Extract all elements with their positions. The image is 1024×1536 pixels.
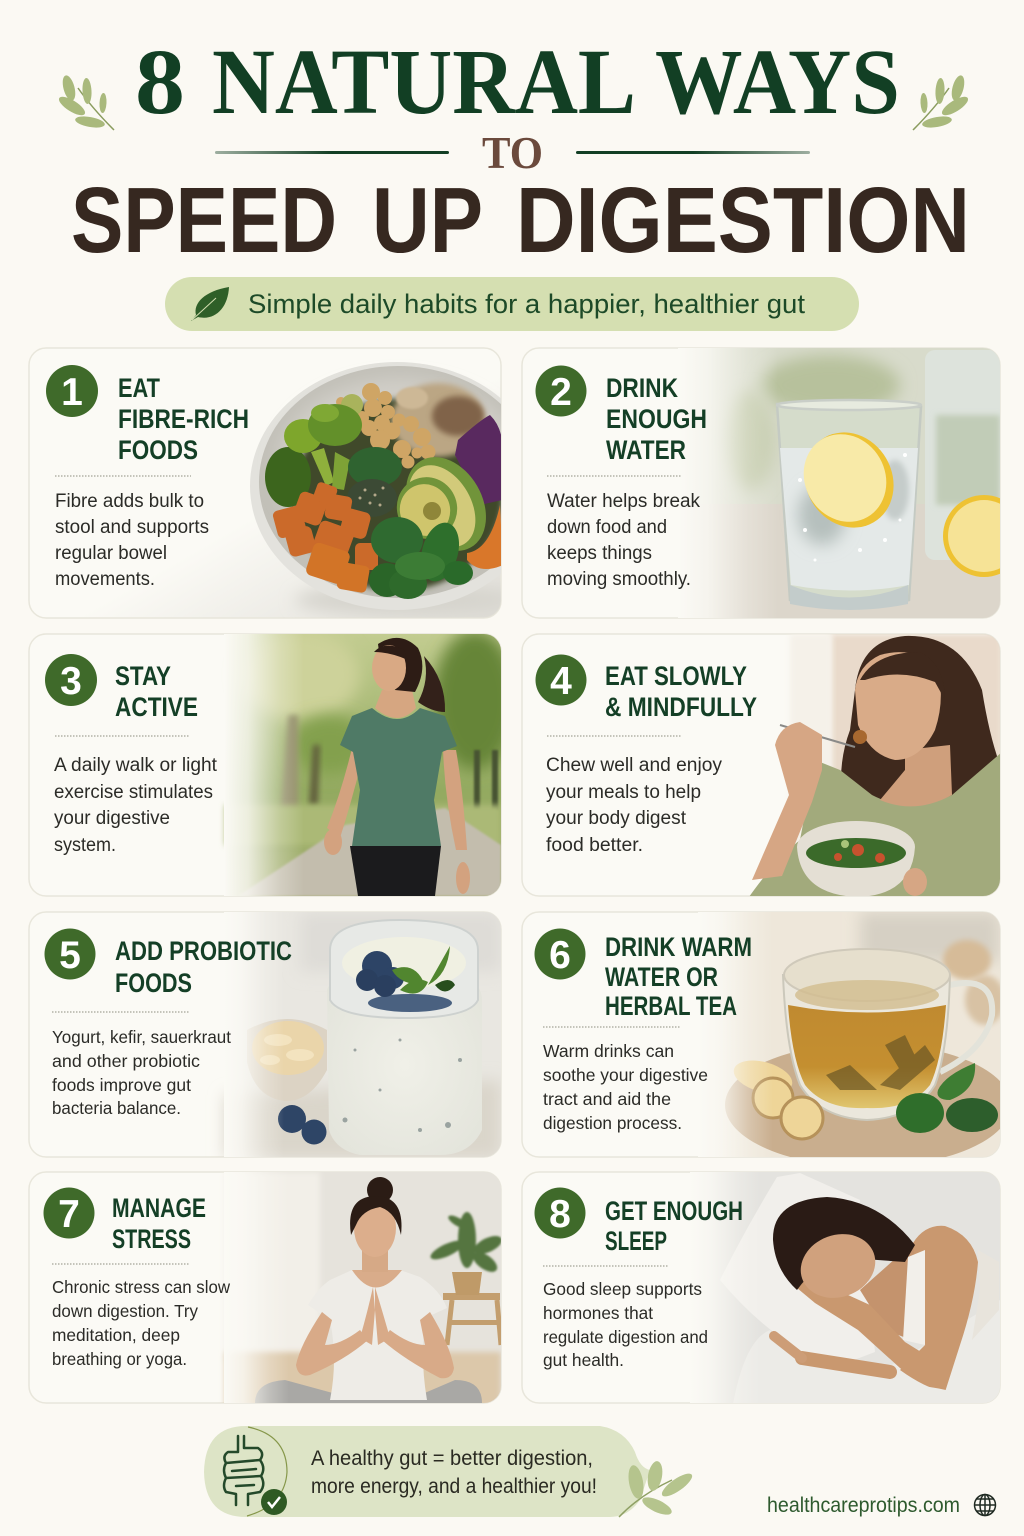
carrot	[467, 505, 503, 569]
number badge	[536, 366, 586, 416]
panel: 8 get enough sleep	[522, 1172, 1002, 1404]
heading	[115, 661, 198, 722]
header	[56, 31, 971, 331]
body text: your digestive	[54, 808, 170, 829]
heading: & MINDFULLY	[605, 692, 757, 722]
heading: FIBRE-RICH	[118, 404, 249, 434]
number badge: 1	[61, 371, 83, 414]
number badge: 3	[60, 660, 82, 703]
heading: SLEEP	[605, 1226, 667, 1256]
body text: soothe your digestive	[543, 1065, 708, 1085]
body text: meditation, deep	[52, 1325, 180, 1345]
body text	[52, 1277, 230, 1369]
panel: 1 eat fibre-rich foods	[29, 348, 544, 618]
heading	[605, 661, 757, 722]
number badge: 2	[550, 371, 572, 414]
photo: herbal tea	[698, 912, 1011, 1167]
heading: ACTIVE	[115, 692, 198, 722]
heading: EAT SLOWLY	[605, 661, 747, 691]
heading: DRINK	[606, 373, 678, 403]
title line 1: 8	[135, 31, 185, 134]
number badge: 5	[59, 934, 81, 977]
body text	[547, 491, 700, 590]
avocado	[406, 457, 486, 551]
heading: GET ENOUGH	[605, 1196, 743, 1226]
panel: 7 manage stress	[29, 1172, 505, 1407]
number badge	[45, 654, 97, 706]
heading	[118, 373, 249, 465]
website: healthcareprotips.com	[767, 1494, 960, 1517]
heading: ENOUGH	[606, 404, 707, 434]
cabbage	[455, 415, 502, 505]
title line 1	[135, 31, 900, 134]
title connector	[215, 127, 810, 178]
body text	[546, 755, 723, 856]
heading: STAY	[115, 661, 171, 691]
icon: check badge	[261, 1489, 287, 1515]
heading: ADD PROBIOTIC	[115, 936, 292, 966]
body text: hormones that	[543, 1303, 653, 1323]
body text: movements.	[55, 569, 155, 590]
heading: DRINK WARM	[605, 932, 752, 962]
body text	[54, 755, 218, 856]
body text: food better.	[546, 835, 643, 856]
body text: bacteria balance.	[52, 1098, 181, 1118]
panel: 2 drink enough water	[522, 348, 1024, 618]
heading	[605, 932, 752, 1021]
panel: 4 eat slowly	[522, 634, 1002, 897]
title line 2: DIGESTION	[516, 168, 970, 272]
heading	[112, 1193, 206, 1254]
number badge: 7	[58, 1193, 80, 1236]
heading: FOODS	[118, 435, 198, 465]
callout text: more energy, and a healthier you!	[311, 1475, 597, 1498]
photo: food bowl	[250, 362, 501, 616]
body text: down food and	[547, 517, 667, 538]
heading: WATER OR	[605, 962, 718, 992]
body text: down digestion. Try	[52, 1301, 198, 1321]
body text: keeps things	[547, 543, 652, 564]
number badge: 4	[550, 660, 572, 703]
body text	[543, 1041, 708, 1133]
heading	[605, 1196, 743, 1256]
body text: digestion process.	[543, 1113, 682, 1133]
spinach centre	[348, 447, 402, 487]
subtitle pill	[165, 277, 859, 331]
body text: and other probiotic	[52, 1051, 200, 1071]
title line 2	[71, 168, 970, 272]
number badge	[534, 1188, 586, 1238]
subtitle text: Simple daily habits for a happier, healthier gut	[248, 289, 806, 319]
icon: leaf	[191, 287, 229, 321]
photo: woman eating salad	[749, 634, 1002, 897]
photo: woman sleeping	[690, 1172, 1002, 1404]
chickpeas	[336, 383, 436, 468]
icon: globe	[974, 1494, 996, 1516]
heading	[115, 936, 292, 998]
body text: system.	[54, 835, 116, 856]
sweet potato	[272, 481, 378, 593]
title line 2: SPEED	[71, 168, 337, 272]
heading: EAT	[118, 373, 160, 403]
icon: right leaf sprig	[913, 74, 971, 130]
body text: Chew well and enjoy	[546, 755, 723, 776]
photo: water glass	[678, 348, 1024, 618]
panel: 5 add probiotic foods	[29, 912, 502, 1158]
broccoli	[265, 447, 311, 507]
title line 1: WAYS	[655, 31, 900, 134]
body text: moving smoothly.	[547, 569, 691, 590]
number badge	[534, 928, 586, 980]
body text: your meals to help	[546, 782, 701, 803]
body text: stool and supports	[55, 517, 209, 538]
title connector: TO	[482, 127, 543, 178]
photo: probiotic jar	[224, 912, 502, 1158]
photo: woman meditating	[224, 1172, 505, 1407]
body text: Warm drinks can	[543, 1041, 674, 1061]
title line 1: NATURAL	[212, 31, 636, 134]
spinach bottom	[371, 517, 423, 563]
footer callout	[204, 1426, 695, 1518]
body text: gut health.	[543, 1350, 624, 1370]
icon: intestines	[224, 1436, 263, 1505]
heading: WATER	[606, 435, 686, 465]
body text: A daily walk or light	[54, 755, 218, 776]
body text: foods improve gut	[52, 1075, 191, 1095]
body	[860, 1248, 925, 1345]
quinoa	[391, 383, 485, 457]
body text: Good sleep supports	[543, 1279, 702, 1299]
body text: regulate digestion and	[543, 1327, 708, 1347]
figure	[327, 751, 358, 836]
panel: 6 warm water or tea	[522, 912, 1011, 1167]
body text	[52, 1027, 231, 1118]
number badge: 6	[549, 934, 571, 977]
body text: regular bowel	[55, 543, 167, 564]
body text: Water helps break	[547, 491, 700, 512]
icon: leaf sprig	[619, 1460, 695, 1518]
panel: 3 stay active	[29, 630, 517, 896]
body text	[543, 1279, 708, 1370]
body text: breathing or yoga.	[52, 1349, 187, 1369]
photo: woman walking in park	[224, 630, 517, 896]
heading	[606, 373, 707, 465]
body text: Chronic stress can slow	[52, 1277, 230, 1297]
body text: your body digest	[546, 808, 687, 829]
callout text	[311, 1447, 597, 1498]
body text: Yogurt, kefir, sauerkraut	[52, 1027, 231, 1047]
figure	[841, 636, 997, 799]
heading: STRESS	[112, 1224, 191, 1254]
callout text: A healthy gut = better digestion,	[311, 1447, 593, 1470]
heading: MANAGE	[112, 1193, 206, 1223]
number badge	[536, 654, 586, 706]
title line 2: UP	[372, 168, 483, 272]
heading: HERBAL TEA	[605, 991, 737, 1021]
number badge	[44, 928, 96, 980]
body text	[55, 491, 209, 590]
heading: FOODS	[115, 968, 192, 998]
icon: left leaf sprig	[56, 74, 114, 130]
body text: Fibre adds bulk to	[55, 491, 204, 512]
body text: exercise stimulates	[54, 782, 213, 803]
number badge	[46, 365, 98, 417]
body text: tract and aid the	[543, 1089, 671, 1109]
number badge	[44, 1188, 94, 1238]
number badge: 8	[549, 1193, 571, 1236]
